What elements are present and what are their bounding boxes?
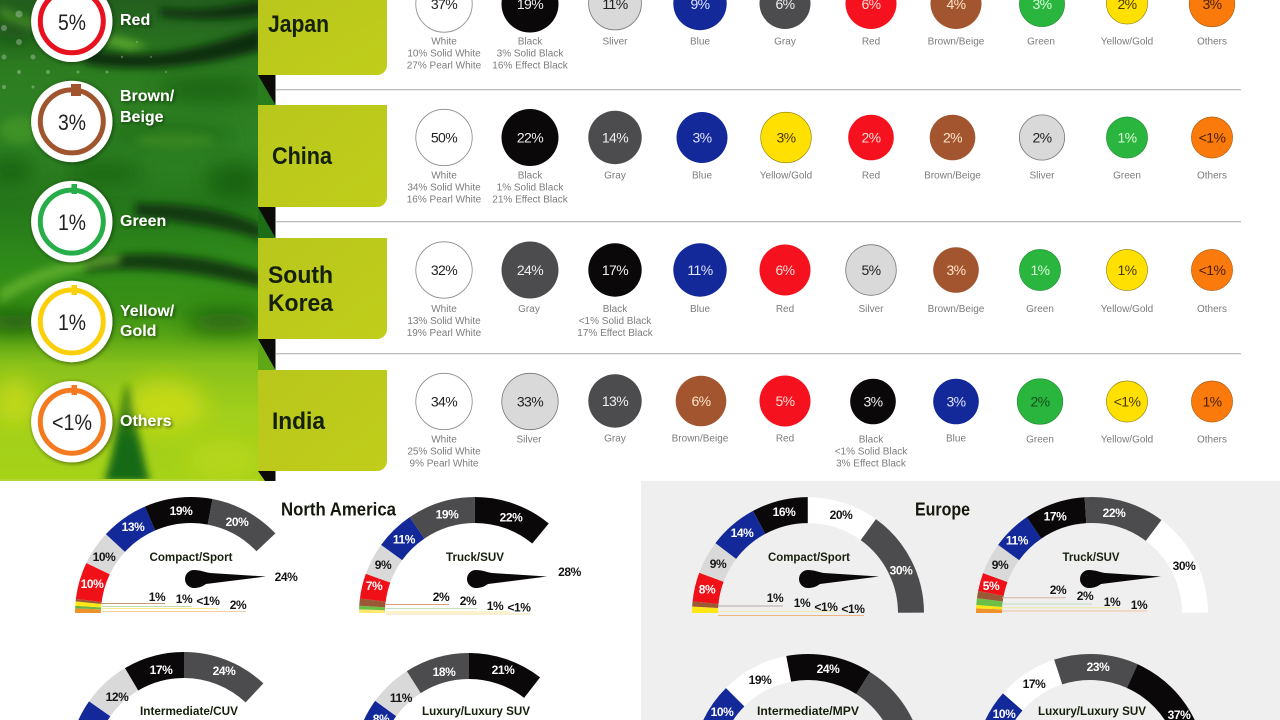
Japan red: [846, 0, 896, 48]
India green: 2%: [1030, 394, 1050, 410]
Japan gray: [760, 0, 810, 48]
China white: 16% Pearl White: [407, 194, 482, 206]
Korea red: 6%: [775, 262, 795, 278]
gauge: North America Truck/SUV: 22%: [500, 510, 523, 524]
Japan green: Green: [1027, 36, 1055, 48]
legend: others: [31, 381, 172, 462]
gauge: Europe Compact/Sport: <1%: [841, 602, 865, 616]
green wedges over black strip: [258, 75, 276, 481]
India yellow: [1101, 381, 1153, 446]
gauge: North America Compact/Sport: 1%: [176, 592, 193, 606]
Korea blue: 11%: [687, 262, 713, 278]
China red: [848, 115, 894, 182]
gauge: North America Compact/Sport: 1%: [149, 590, 166, 604]
gauge: Europe Truck/SUV: 9%: [992, 558, 1009, 572]
India others: [1191, 381, 1233, 446]
Korea others: Others: [1197, 304, 1227, 315]
gauge: Europe Luxury/Luxury SUV: Luxury/Luxury SUV: [1038, 704, 1146, 718]
China gray: 14%: [602, 130, 628, 146]
India red: [760, 376, 810, 445]
India black: [835, 379, 908, 470]
Korea blue: [673, 243, 727, 315]
China white: 50%: [431, 130, 457, 146]
Japan black: [492, 0, 569, 72]
gauge: Europe Compact/Sport: 14%: [731, 526, 754, 540]
Korea yellow: [1101, 249, 1153, 315]
Korea black: <1% Solid Black: [579, 316, 652, 327]
heading: Europe: Europe: [915, 500, 970, 520]
India white: 25% Solid White: [407, 447, 481, 458]
China green: 1%: [1117, 130, 1137, 146]
gauge: North America Truck/SUV: Truck/SUV: [446, 550, 504, 564]
gauge: North America Compact/Sport: 10%: [81, 577, 104, 591]
China white: 34% Solid White: [407, 182, 481, 194]
legend: yellow/gold: Gold: [120, 323, 156, 340]
black edge strip behind country tabs: [258, 0, 276, 481]
India black: Black: [859, 435, 884, 446]
India black: 3% Effect Black: [836, 459, 907, 470]
gauge: Europe Compact/Sport: 20%: [830, 508, 853, 522]
gauge: Europe Truck/SUV: 1%: [1104, 595, 1121, 609]
China blue: [676, 112, 728, 182]
Korea brown: Brown/Beige: [928, 304, 985, 315]
Korea silver: [846, 245, 896, 315]
Korea silver: Silver: [858, 304, 884, 315]
gauge: North America Truck/SUV: 28%: [558, 565, 582, 579]
legend: brown/beige: [31, 81, 175, 162]
India black: <1% Solid Black: [835, 447, 908, 458]
India silver: [502, 373, 558, 446]
gauge: North America Truck/SUV: 1%: [487, 599, 504, 613]
India gray: [588, 374, 642, 445]
gauge: Europe Intermediate/MPV: 24%: [817, 662, 840, 676]
gauge: Europe Intermediate/MPV: Intermediate/MPV: [757, 704, 859, 718]
gauge: North America Truck/SUV: 19%: [436, 508, 459, 522]
gauge: North America Truck/SUV: 9%: [375, 558, 392, 572]
Japan white: [407, 0, 482, 71]
country tab: Japan: [258, 0, 387, 75]
India gray: 13%: [602, 393, 628, 409]
China black: 21% Effect Black: [492, 194, 569, 206]
country tab: India: [258, 370, 387, 471]
gauge: Europe Compact/Sport: Compact/Sport: [768, 550, 850, 564]
gauge: North America Truck/SUV: 11%: [393, 532, 416, 546]
China yellow: 3%: [776, 130, 796, 146]
Korea green: [1019, 249, 1061, 315]
gauge: Europe Compact/Sport: 1%: [767, 591, 784, 605]
gauge: Europe Truck/SUV: 22%: [1103, 506, 1126, 520]
legend: green: Green: [120, 213, 166, 230]
Korea red: Red: [776, 304, 794, 315]
Japan others: [1189, 0, 1235, 48]
legend: red: Red: [120, 12, 150, 29]
India white: White: [431, 435, 457, 446]
Korea black: [577, 243, 654, 339]
row: India colors: [407, 373, 1233, 470]
country tab: China: China: [272, 143, 333, 170]
gauge: Europe Luxury/Luxury SUV: 23%: [1087, 660, 1110, 674]
gauge: North America Luxury/Luxury SUV: 11%: [390, 691, 413, 705]
country tab: South Korea: [258, 238, 387, 339]
India blue: Blue: [946, 434, 966, 445]
Korea blue: Blue: [690, 304, 710, 315]
Japan yellow: [1101, 0, 1153, 47]
India others: 1%: [1202, 394, 1222, 410]
heading: North America: North America: [281, 500, 397, 520]
legend: others: <1%: [52, 410, 92, 435]
legend: brown/beige: 3%: [58, 110, 86, 135]
gauge: Europe Intermediate/MPV: 10%: [711, 705, 734, 719]
gauge: Europe Truck/SUV: 11%: [1006, 534, 1029, 548]
legend: yellow/gold: Yellow/: [120, 303, 175, 320]
Korea black: Black: [603, 304, 628, 315]
Japan white: White: [431, 36, 457, 48]
Korea white: 13% Solid White: [407, 316, 481, 327]
gauge: North America Compact/Sport: 20%: [226, 515, 249, 529]
India others: Others: [1197, 435, 1227, 446]
India brown: [672, 376, 729, 445]
gauge: North America Truck/SUV: 2%: [460, 594, 477, 608]
China others: Others: [1197, 170, 1227, 182]
legend: brown/beige: Brown/: [120, 88, 175, 105]
Japan others: Others: [1197, 36, 1227, 48]
Korea others: [1191, 249, 1233, 315]
gauge: North America Compact/Sport: 19%: [170, 504, 193, 518]
row divider lines: [276, 90, 1241, 354]
gauge: North America Compact/Sport: 2%: [230, 598, 247, 612]
India yellow: <1%: [1114, 394, 1140, 410]
legend: brown/beige: Beige: [120, 109, 164, 126]
Korea black: 17%: [602, 262, 628, 278]
gauge: Europe Compact/Sport: 8%: [699, 582, 716, 596]
gauge: Europe Truck/SUV: 1%: [1131, 598, 1148, 612]
Japan black: Black: [518, 36, 543, 48]
panel: Europe background: [641, 481, 1280, 720]
China green: [1106, 117, 1148, 182]
China black: 22%: [517, 130, 543, 146]
gauge: North America Intermediate/CUV: 24%: [213, 664, 236, 678]
India yellow: Yellow/Gold: [1101, 435, 1153, 446]
Korea brown: [928, 247, 985, 315]
legend: green: 1%: [58, 210, 86, 235]
Japan white: 10% Solid White: [407, 48, 481, 60]
gauge: Europe Compact/Sport: 30%: [890, 564, 913, 578]
Japan silver: Sliver: [602, 36, 628, 48]
gauge: Europe Compact/Sport: 9%: [710, 557, 727, 571]
China brown: Brown/Beige: [924, 170, 981, 182]
Korea green: 1%: [1030, 262, 1050, 278]
legend: yellow/gold: [31, 281, 175, 362]
gauge: North America Luxury/Luxury SUV: [364, 663, 532, 720]
India silver: 33%: [517, 394, 543, 410]
gauge: Europe Luxury/Luxury SUV: 17%: [1023, 677, 1046, 691]
Korea silver: 5%: [861, 262, 881, 278]
gauge: Europe Intermediate/MPV: [703, 662, 913, 720]
gauge: North America Luxury/Luxury SUV: 21%: [492, 663, 515, 677]
India green: Green: [1026, 435, 1054, 446]
gauge: North America Compact/Sport: 10%: [93, 550, 116, 564]
China blue: 3%: [692, 130, 712, 146]
gauge: North America Compact/Sport: [81, 504, 298, 613]
China yellow: [760, 112, 812, 182]
Korea others: <1%: [1199, 262, 1225, 278]
China brown: 2%: [943, 130, 962, 146]
Japan blue: Blue: [690, 36, 710, 48]
gauge: North America Intermediate/CUV: [78, 663, 255, 720]
Korea white: [407, 242, 482, 339]
gauge: Europe Compact/Sport: 16%: [773, 505, 796, 519]
India white: [407, 373, 481, 470]
panel: green legend background: [0, 0, 265, 482]
gauge: North America Truck/SUV: [366, 508, 582, 614]
Japan red: Red: [862, 36, 880, 48]
China black: [492, 109, 569, 206]
India gray: Gray: [604, 434, 626, 445]
legend: red: [31, 0, 150, 62]
India blue: [933, 379, 979, 445]
gauge: North America Compact/Sport: <1%: [196, 594, 220, 608]
row: South Korea colors: [407, 242, 1233, 339]
Korea gray: Gray: [518, 304, 540, 315]
Japan black: 3% Solid Black: [497, 48, 564, 60]
China brown: [924, 115, 981, 182]
gauge: North America Compact/Sport: 13%: [122, 520, 145, 534]
Japan blue: [673, 0, 727, 48]
gauge: Europe Truck/SUV: [983, 506, 1196, 613]
China blue: Blue: [692, 170, 712, 182]
China yellow: Yellow/Gold: [760, 170, 812, 182]
gauge: Europe Intermediate/MPV: 19%: [749, 673, 772, 687]
country tab: China: [258, 105, 387, 207]
gauge: North America Compact/Sport: Compact/Sport: [150, 550, 232, 564]
legend: yellow/gold: 1%: [58, 310, 86, 335]
gauge: North America Luxury/Luxury SUV: Luxury/Luxury SUV: [422, 704, 530, 718]
legend: others: Others: [120, 413, 172, 430]
Korea white: 19% Pearl White: [407, 328, 482, 339]
Japan yellow: Yellow/Gold: [1101, 36, 1153, 48]
Korea gray: 24%: [517, 262, 543, 278]
Japan silver: [589, 0, 641, 48]
gauge: Europe Truck/SUV: 5%: [983, 579, 1000, 593]
gauge: Europe Truck/SUV: 30%: [1173, 559, 1196, 573]
China white: [407, 109, 482, 206]
Japan brown: Brown/Beige: [928, 36, 985, 48]
Korea black: 17% Effect Black: [577, 328, 654, 339]
gauge: North America Truck/SUV: 2%: [433, 590, 450, 604]
China red: 2%: [861, 130, 881, 146]
Korea white: White: [431, 304, 457, 315]
Korea brown: 3%: [946, 262, 966, 278]
gauge: North America Luxury/Luxury SUV: 18%: [433, 665, 456, 679]
gauge: Europe Compact/Sport: <1%: [814, 600, 838, 614]
gauge: North America Compact/Sport: 24%: [275, 570, 298, 584]
gauge: North America Truck/SUV: 7%: [366, 579, 383, 593]
China red: Red: [862, 170, 880, 182]
China others: [1191, 117, 1233, 182]
country tab: South Korea: Korea: [268, 290, 334, 317]
gauge: Europe Truck/SUV: 2%: [1050, 583, 1067, 597]
row: Japan colors: [407, 0, 1235, 72]
lime bottom edge: [0, 479, 258, 481]
China black: 1% Solid Black: [497, 182, 564, 194]
Korea yellow: Yellow/Gold: [1101, 304, 1153, 315]
India blue: 3%: [946, 394, 966, 410]
gauge: Europe Luxury/Luxury SUV: [985, 660, 1195, 720]
China black: Black: [518, 170, 543, 182]
gauge: Europe Truck/SUV: 17%: [1044, 510, 1067, 524]
China gray: [588, 111, 642, 182]
Japan black: 16% Effect Black: [492, 60, 569, 72]
Korea yellow: 1%: [1117, 262, 1137, 278]
China silver: 2%: [1032, 130, 1052, 146]
India brown: 6%: [691, 393, 711, 409]
India white: 9% Pearl White: [410, 459, 479, 470]
gauge: Europe Compact/Sport: 1%: [794, 596, 811, 610]
legend: green: [31, 181, 166, 262]
country tab: India: India: [272, 408, 326, 435]
gauge: Europe Truck/SUV: 2%: [1077, 589, 1094, 603]
India white: 34%: [431, 394, 457, 410]
gauge: North America Intermediate/CUV: 12%: [106, 690, 129, 704]
Korea white: 32%: [431, 262, 457, 278]
Japan green: [1019, 0, 1065, 47]
China green: Green: [1113, 170, 1141, 182]
India brown: Brown/Beige: [672, 434, 729, 445]
China silver: [1019, 115, 1065, 182]
India black: 3%: [863, 394, 883, 410]
India red: Red: [776, 434, 794, 445]
India red: 5%: [775, 393, 795, 409]
gauge: North America Intermediate/CUV: 17%: [150, 663, 173, 677]
Japan brown: [928, 0, 985, 48]
Korea gray: [502, 242, 558, 315]
country tab: Japan: Japan: [268, 11, 329, 38]
India silver: Silver: [516, 435, 542, 446]
Korea green: Green: [1026, 304, 1054, 315]
Japan gray: Gray: [774, 36, 796, 48]
China white: White: [431, 170, 457, 182]
gauge: Europe Compact/Sport: [699, 505, 913, 616]
Japan white: 27% Pearl White: [407, 60, 482, 72]
legend: red: 5%: [58, 10, 86, 35]
China silver: Sliver: [1029, 170, 1055, 182]
country tab: South Korea: South: [268, 262, 333, 289]
gauge: Europe Truck/SUV: Truck/SUV: [1062, 550, 1120, 564]
Korea red: [760, 244, 810, 315]
China others: <1%: [1199, 130, 1225, 146]
gauge: North America Intermediate/CUV: Intermediate/CUV: [140, 704, 238, 718]
India green: [1017, 379, 1063, 446]
gauge: North America Truck/SUV: <1%: [507, 600, 531, 614]
row: China colors: [407, 109, 1233, 206]
China gray: Gray: [604, 170, 626, 182]
